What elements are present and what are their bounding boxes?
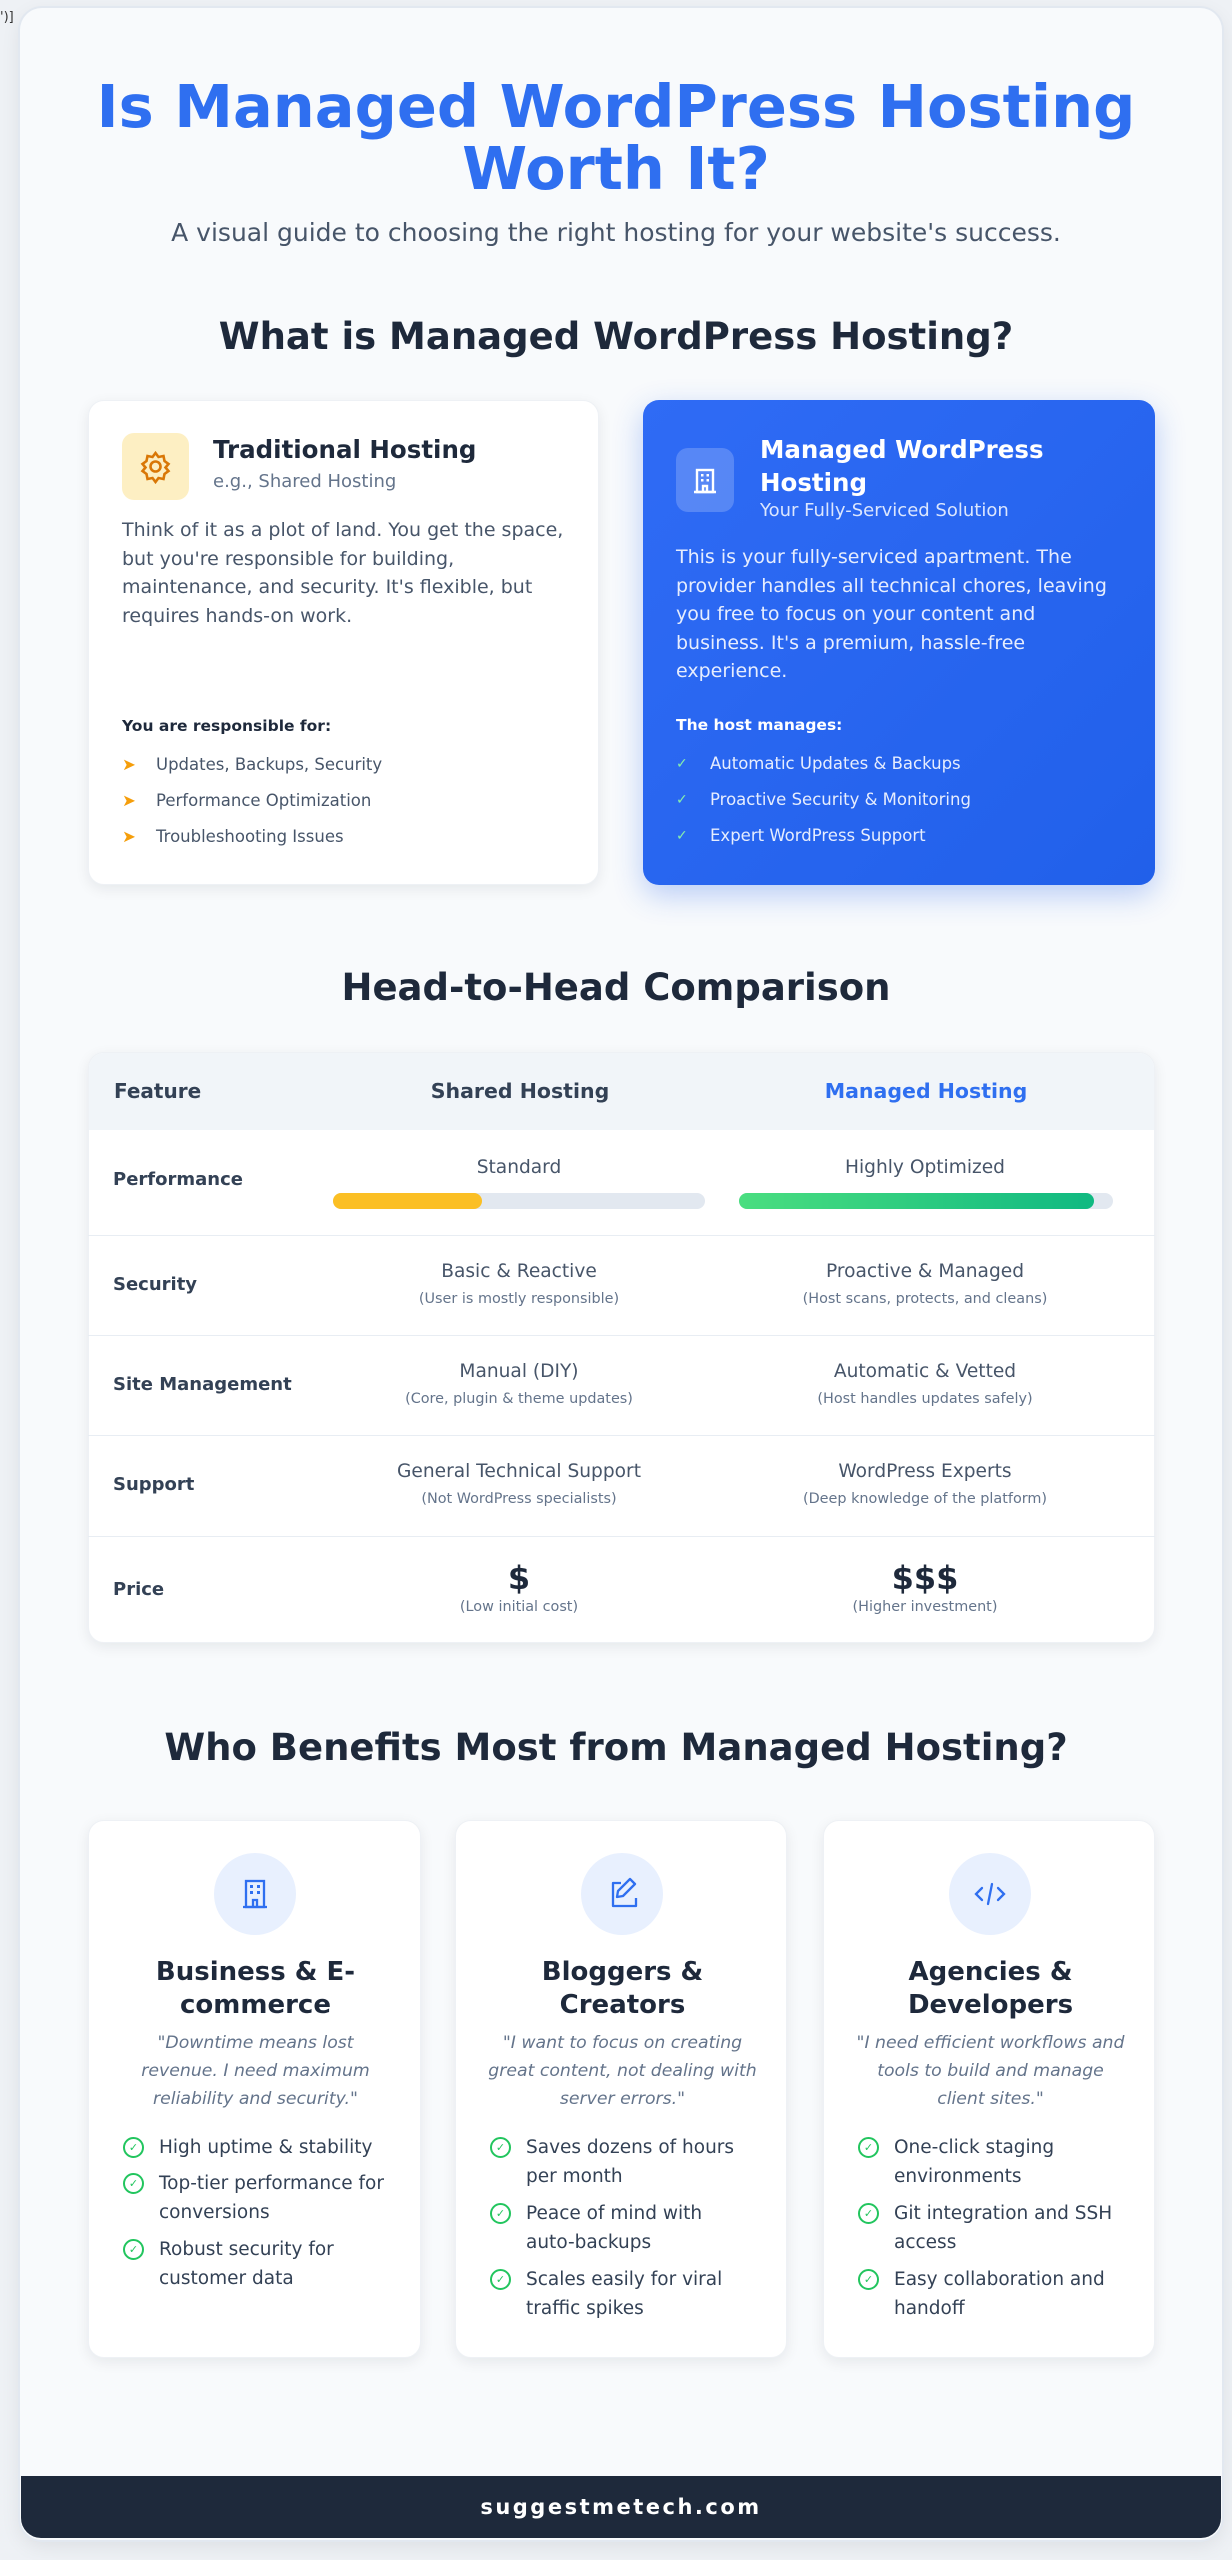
- benefits list: [858, 2137, 1112, 2319]
- row: price: $$$: [892, 1559, 958, 1597]
- row: support: WordPress Experts: [838, 1461, 1012, 1482]
- panel: traditional hosting: [88, 400, 599, 885]
- list: ➤: [122, 791, 136, 810]
- heading: who benefits: Who Benefits Most from Managed Hosting?: [164, 1726, 1068, 1769]
- row: security: [88, 1235, 1155, 1335]
- bar: shared: [333, 1193, 705, 1209]
- title: commerce: [180, 1990, 331, 2020]
- row: site management: (Core, plugin & theme updates): [405, 1391, 633, 1407]
- title: Agencies &: [908, 1957, 1073, 1987]
- list: Troubleshooting Issues: [156, 827, 344, 846]
- row: support: [88, 1435, 1155, 1536]
- row: site management: Manual (DIY): [459, 1361, 579, 1382]
- quote: "Downtime means lost revenue. I need maximum reliability and security.": [141, 2033, 370, 2109]
- row: support: Support: [113, 1474, 194, 1495]
- row: site management: Automatic & Vetted: [834, 1361, 1016, 1382]
- row: performance: Highly Optimized: [845, 1157, 1005, 1178]
- row: performance: [113, 1157, 1113, 1209]
- table header: [89, 1053, 1156, 1130]
- panel: business: [88, 1820, 421, 2358]
- text: ')]: [0, 10, 14, 25]
- benefits list: ✓: [496, 2273, 505, 2286]
- subtitle: A visual guide to choosing the right hosting for your website's success.: [171, 218, 1061, 247]
- list: Automatic Updates & Backups: [710, 754, 961, 773]
- panel: bloggers: [455, 1820, 787, 2358]
- row: site management: Site Management: [113, 1374, 292, 1395]
- benefits list: ✓: [129, 2177, 138, 2190]
- benefits list: ✓: [129, 2243, 138, 2256]
- benefits list: Easy collaboration and handoff: [894, 2269, 1105, 2319]
- list: Updates, Backups, Security: [156, 755, 382, 774]
- row: support: General Technical Support: [397, 1461, 641, 1482]
- title: Worth It?: [462, 134, 770, 203]
- row: security: (Host scans, protects, and cleans): [803, 1291, 1047, 1307]
- row: support: (Not WordPress specialists): [421, 1491, 617, 1507]
- row: performance: Performance: [113, 1169, 243, 1190]
- panel: managed hosting: Your Fully-Serviced Solution: [760, 500, 1009, 521]
- list: ✓: [676, 756, 688, 772]
- list: Proactive Security & Monitoring: [710, 790, 971, 809]
- list heading: You are responsible for:: [122, 717, 331, 735]
- row: price: Price: [113, 1579, 164, 1600]
- comparison table: [88, 1052, 1155, 1643]
- benefits list: ✓: [496, 2207, 505, 2220]
- benefits list: One-click staging environments: [894, 2137, 1054, 2187]
- quote: "I want to focus on creating great content, not dealing with server errors.": [488, 2033, 757, 2109]
- title: Business & E-: [156, 1957, 355, 1987]
- icon: code: [949, 1853, 1031, 1935]
- title: Traditional Hosting: [213, 435, 476, 464]
- icon: building: [214, 1853, 296, 1935]
- description: This is your fully-serviced apartment. The provider handles all technical chores, leaving you free to focus on your content and business. It's a premium, hassle-free experience.: [676, 546, 1107, 682]
- row: price: [88, 1536, 1155, 1642]
- benefits list: Git integration and SSH access: [894, 2203, 1112, 2253]
- title: Developers: [908, 1990, 1073, 2020]
- title: Managed WordPress Hosting: [760, 435, 1044, 497]
- title: [97, 72, 1135, 203]
- list: ➤: [122, 827, 136, 846]
- benefits list: ✓: [864, 2207, 873, 2220]
- row: performance: Standard: [477, 1157, 561, 1178]
- list: ✓: [676, 828, 688, 844]
- benefits list: ✓: [864, 2273, 873, 2286]
- footer: suggestmetech.com: [480, 2495, 762, 2519]
- icon: gear: [122, 433, 189, 500]
- row: security: (User is mostly responsible): [419, 1291, 619, 1307]
- row: site management: (Host handles updates safely): [817, 1391, 1033, 1407]
- footer: [21, 2476, 1221, 2538]
- description: Think of it as a plot of land. You get the space, but you're responsible for building, maintenance, and security. It's flexible, but requires hands-on work.: [122, 519, 563, 626]
- title: Bloggers &: [542, 1957, 703, 1987]
- table header: Managed Hosting: [825, 1079, 1027, 1103]
- benefits list: Top-tier performance for conversions: [159, 2173, 384, 2223]
- list: ✓: [676, 792, 688, 808]
- panel: traditional hosting: e.g., Shared Hosting: [213, 471, 396, 492]
- benefits list: Saves dozens of hours per month: [526, 2137, 734, 2187]
- row: price: (Low initial cost): [460, 1599, 578, 1615]
- title: Is Managed WordPress Hosting: [97, 72, 1135, 141]
- benefits list: High uptime & stability: [159, 2137, 372, 2158]
- row: security: Proactive & Managed: [826, 1261, 1024, 1282]
- quote: "I need efficient workflows and tools to build and manage client sites.": [856, 2033, 1124, 2109]
- title: [542, 1957, 703, 2020]
- panel: managed hosting: [643, 400, 1155, 885]
- list: ➤: [122, 755, 136, 774]
- icon: edit: [581, 1853, 663, 1935]
- benefits list: ✓: [496, 2141, 505, 2154]
- table header: Shared Hosting: [431, 1079, 609, 1103]
- list: [676, 754, 971, 845]
- benefits list: [123, 2137, 384, 2289]
- list: Performance Optimization: [156, 791, 371, 810]
- title: Creators: [560, 1990, 685, 2020]
- row: security: Basic & Reactive: [441, 1261, 597, 1282]
- heading: what is: What is Managed WordPress Hosting?: [219, 315, 1013, 358]
- row: price: $: [508, 1559, 530, 1597]
- row: support: (Deep knowledge of the platform): [803, 1491, 1047, 1507]
- bar: managed: [739, 1193, 1113, 1209]
- benefits list: Peace of mind with auto-backups: [526, 2203, 702, 2253]
- heading: comparison: Head-to-Head Comparison: [341, 966, 891, 1009]
- list: [122, 755, 382, 846]
- row: site management: [88, 1335, 1155, 1435]
- title: [156, 1957, 355, 2020]
- benefits list: ✓: [864, 2141, 873, 2154]
- benefits list: ✓: [129, 2141, 138, 2154]
- row: price: (Higher investment): [853, 1599, 997, 1615]
- benefits list: Scales easily for viral traffic spikes: [526, 2269, 722, 2319]
- table header: Feature: [114, 1079, 201, 1103]
- benefits list: Robust security for customer data: [159, 2239, 334, 2289]
- list: Expert WordPress Support: [710, 826, 926, 845]
- icon: building: [676, 448, 734, 512]
- row: security: Security: [113, 1274, 197, 1295]
- panel: agencies: [823, 1820, 1155, 2358]
- benefits list: [490, 2137, 734, 2319]
- title: [908, 1957, 1073, 2020]
- list heading: The host manages:: [676, 716, 842, 734]
